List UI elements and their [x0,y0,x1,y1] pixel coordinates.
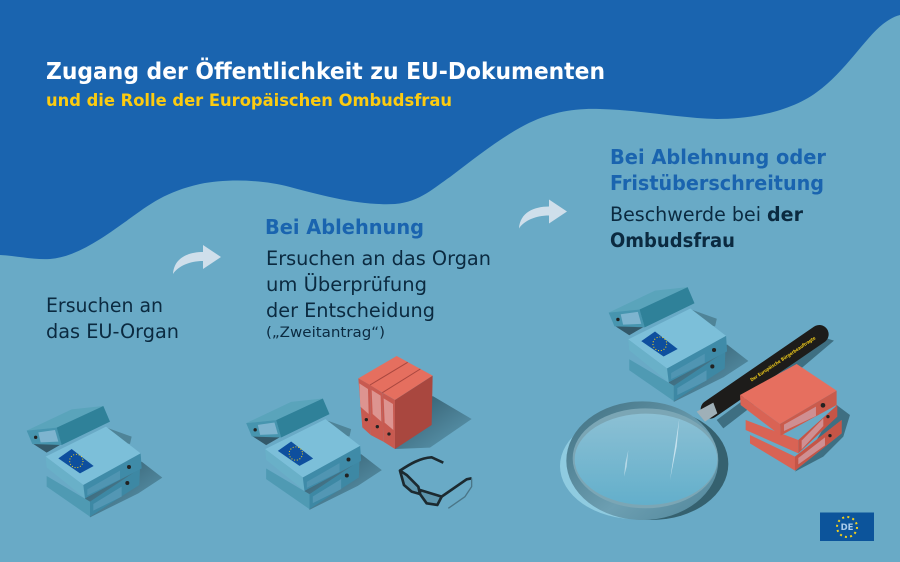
illustration: blue binders step 1 [27,406,162,517]
step 3 heading [610,145,827,195]
illustration: glasses [400,457,472,508]
arrow 1 [173,245,221,274]
illustration: red upright binders [358,356,472,449]
illustration: red binder stack [740,364,850,472]
EU flag badge with DE [820,512,874,541]
step 2 text: („Zweitantrag“) [266,325,385,341]
step 3 text: Ombudsfrau [610,229,735,252]
step 2 text: um Überprüfung [266,273,427,296]
step 1 text: das EU-Organ [46,320,179,343]
illustration: magnifying glass [560,334,834,520]
blue wave header [0,0,900,259]
step 1 text [46,294,179,343]
illustration: blue binders step 3 [609,287,748,402]
step 2 text: der Entscheidung [266,299,435,322]
title: Zugang der Öffentlichkeit zu EU-Dokumenten [46,57,605,85]
step 2 text: Ersuchen an das Organ [266,247,491,270]
step 3 heading: Bei Ablehnung oder [610,145,827,169]
subtitle: und die Rolle der Europäischen Ombudsfrau [46,91,452,111]
step 2 heading: Bei Ablehnung [265,215,424,239]
arrow 2 [519,200,567,228]
illustration: magnifying glass: Der Europäische Bürgerbeauftragte [749,335,817,383]
step 3 text [610,203,803,252]
step 1 text: Ersuchen an [46,294,163,317]
step 2 text [266,247,491,341]
step 3 heading: Fristüberschreitung [610,171,824,195]
EU flag badge with DE: DE [841,523,854,533]
step 3 text: Beschwerde bei der [610,203,803,226]
illustration: blue binders step 2 [246,398,382,510]
